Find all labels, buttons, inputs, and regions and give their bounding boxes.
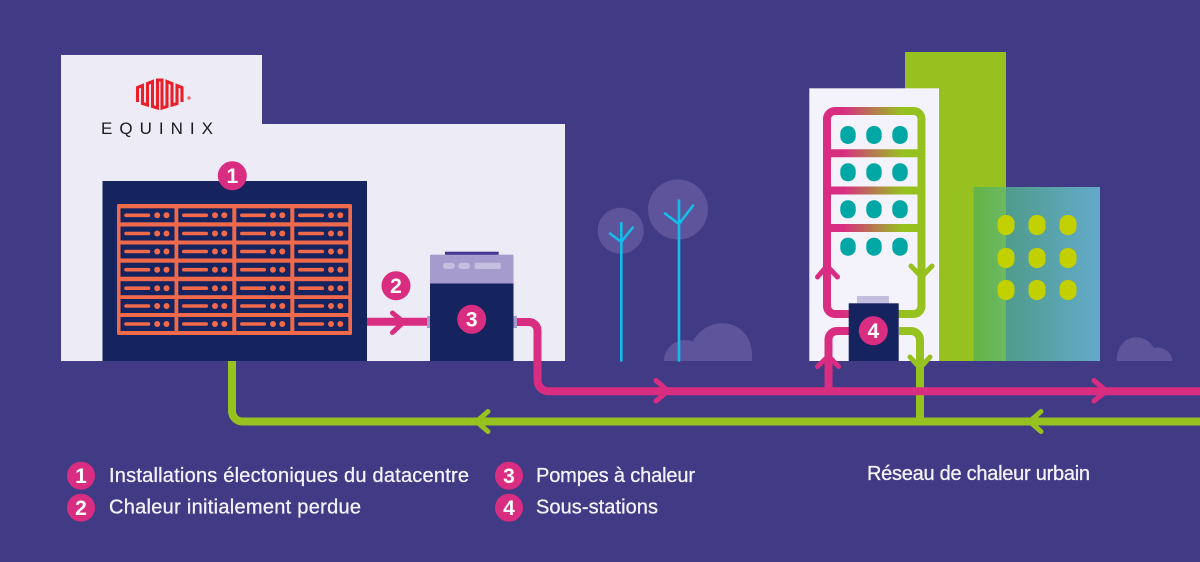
- pump cap: [445, 252, 499, 255]
- tree right: [648, 180, 708, 360]
- pink arrows: [392, 313, 1106, 401]
- datacentre building: [61, 55, 565, 361]
- pump top: [430, 255, 514, 284]
- cloud left: [664, 323, 752, 361]
- legend item 4: Sous-stations: [536, 496, 658, 518]
- cloud right: [1117, 337, 1172, 361]
- legend item 4: [495, 494, 658, 522]
- pump body: [430, 284, 514, 361]
- Equinix logo: [101, 80, 213, 138]
- building: white residential: [809, 88, 939, 361]
- legend item 3: Pompes à chaleur: [536, 465, 695, 487]
- green return pipe: [232, 331, 1200, 422]
- server rack grid: [117, 204, 352, 335]
- heat pump unit: [427, 252, 517, 361]
- legend item 1: Installations électoniques du datacentre: [109, 465, 469, 487]
- badge 2: 2: [390, 275, 402, 298]
- arrow: loop up: [818, 266, 838, 277]
- badge 4: 4: [867, 320, 879, 343]
- badge 1: 1: [226, 165, 238, 188]
- badge 1: [218, 161, 247, 190]
- panel: server room: [102, 181, 367, 361]
- building heating loop: [827, 111, 922, 314]
- legend item 2: 2: [75, 497, 87, 520]
- substation: [849, 296, 899, 361]
- pink supply pipe: [367, 322, 1200, 391]
- building windows: [840, 126, 908, 256]
- arrow: loop down: [911, 266, 932, 277]
- legend item 3: [495, 462, 695, 490]
- badge 3: [457, 305, 486, 334]
- building: gradient tower: [974, 187, 1100, 361]
- pump connectors: [427, 316, 431, 328]
- district heating network label: Réseau de chaleur urbain: [867, 463, 1090, 485]
- legend item 3: 3: [503, 465, 515, 488]
- badge 4: [859, 316, 888, 345]
- badge 2: [382, 271, 410, 300]
- badge 3: 3: [466, 309, 478, 332]
- logo mark: [138, 80, 182, 108]
- legend item 2: Chaleur initialement perdue: [109, 496, 361, 518]
- legend item 2: [67, 494, 361, 522]
- logo registered mark: [187, 96, 191, 100]
- logo wordmark: EQUINIX: [101, 119, 213, 138]
- tree left: [598, 208, 644, 360]
- building: tall green: [905, 52, 1006, 361]
- tower windows: [998, 215, 1076, 300]
- legend item 4: 4: [503, 497, 515, 520]
- legend item 1: 1: [75, 465, 87, 488]
- green arrows: [476, 357, 1041, 432]
- pump controls: [443, 263, 455, 269]
